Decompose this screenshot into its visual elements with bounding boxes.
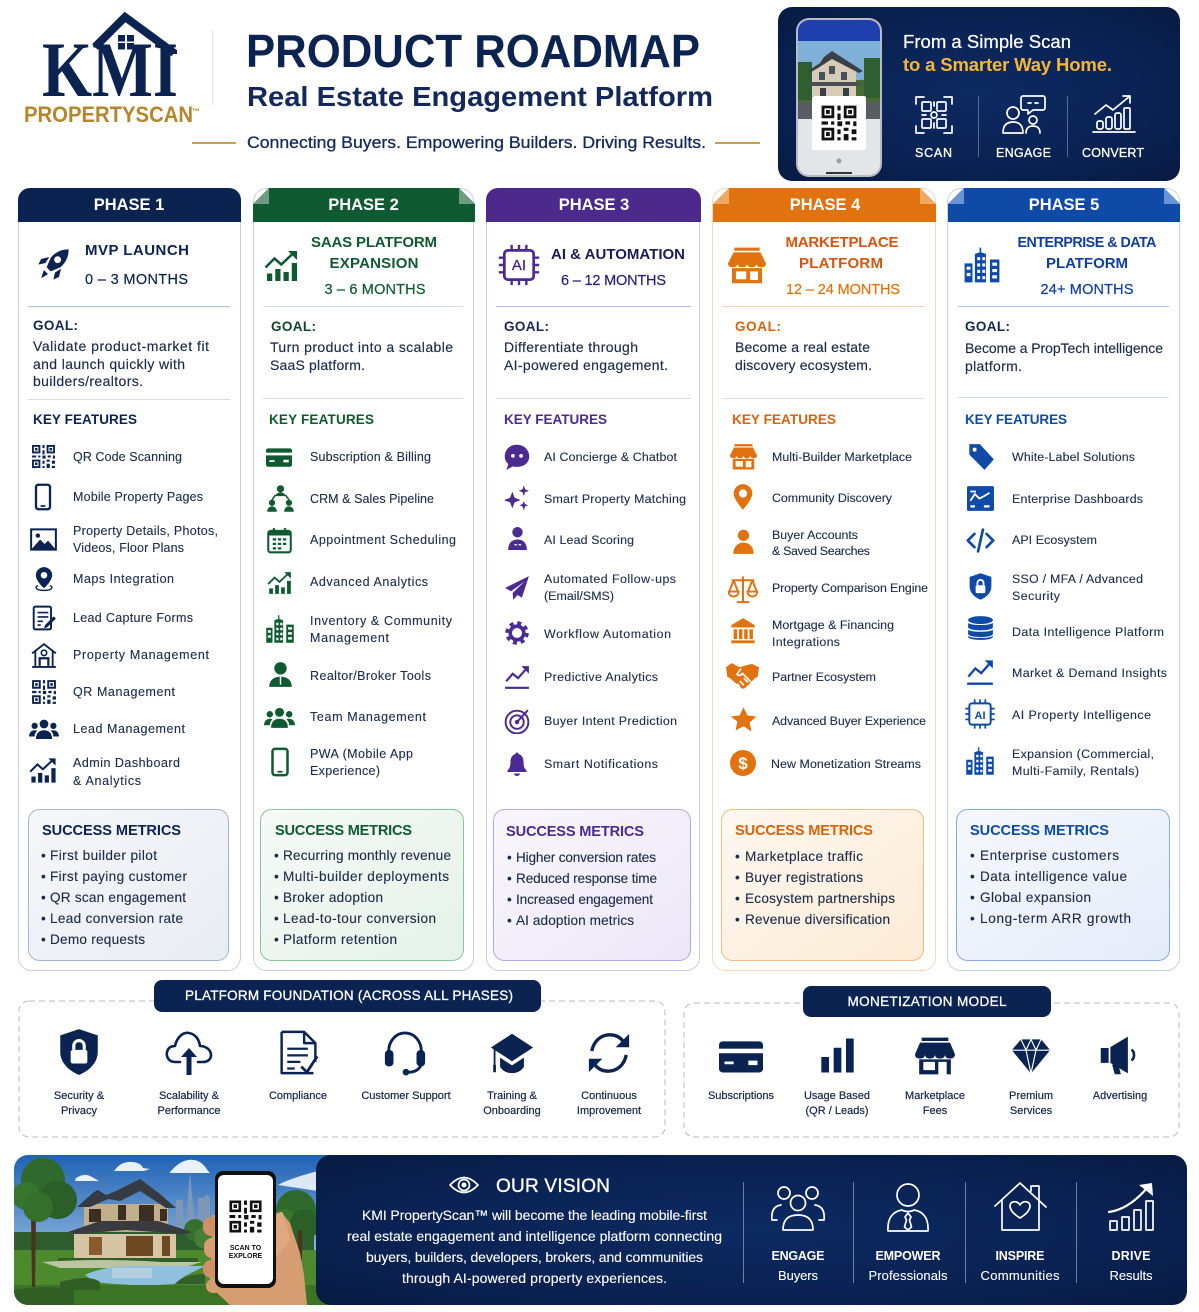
phase 2 header: PHASE 2 xyxy=(328,196,399,214)
feature: Smart Property Matching xyxy=(504,486,686,510)
vision photo: house and phone xyxy=(12,1155,334,1305)
feature: Expansion: Multi-Family, Rentals) xyxy=(1012,764,1139,778)
inspire communities: INSPIRE xyxy=(996,1249,1044,1263)
phase 3 success metrics: • xyxy=(507,913,512,928)
feature: Buyer Accounts xyxy=(733,528,870,558)
phase 5 header: PHASE 5 xyxy=(1029,196,1099,214)
feature: Multi-Builder Marketplace xyxy=(730,444,912,469)
feature: Realtor/Broker Tools: Realtor/Broker Tools xyxy=(310,669,431,683)
phase 4 success metrics: Ecosystem partnerships xyxy=(745,891,895,906)
phone in hand: SCAN TO xyxy=(230,1245,262,1252)
item: customer support: Customer Support xyxy=(361,1090,451,1102)
phone in hand: EXPLORE xyxy=(229,1253,263,1260)
phase 5 title: PLATFORM xyxy=(1046,255,1128,272)
phase 1 success metrics: SUCCESS METRICS xyxy=(42,823,181,839)
platform foundation heading xyxy=(154,980,541,1012)
phase 4 header: PHASE 4 xyxy=(790,196,861,214)
callout text: From a Simple Scan xyxy=(903,31,1071,52)
feature: Appointment Scheduling xyxy=(268,528,456,552)
drive results: DRIVE xyxy=(1112,1249,1150,1263)
feature: Mortgage & Financing xyxy=(731,618,894,649)
drive results: Results xyxy=(1110,1268,1153,1283)
phase 5 success metrics: • xyxy=(970,911,975,926)
feature: QR Code Scanning xyxy=(32,445,182,468)
inspire communities xyxy=(980,1183,1060,1283)
empower professionals: EMPOWER xyxy=(876,1249,940,1263)
logo xyxy=(24,17,200,127)
vision text: buyers, builders, developers, brokers, and communities xyxy=(366,1249,703,1265)
icon: convert: CONVERT xyxy=(1082,146,1144,160)
phase 4 success metrics: • xyxy=(735,912,740,927)
phase 4 goal: Become a real estate xyxy=(735,339,870,355)
item: premium services: Services xyxy=(1010,1105,1053,1117)
phase 4 success metrics: Buyer registrations xyxy=(745,870,863,885)
phase 5 success metrics xyxy=(956,810,1170,960)
platform foundation heading: PLATFORM FOUNDATION (ACROSS ALL PHASES) xyxy=(185,988,513,1003)
engage buyers xyxy=(772,1187,824,1283)
feature list: phase 5 xyxy=(965,444,1167,778)
feature: Community Discovery xyxy=(734,484,893,510)
icon: engage: ENGAGE xyxy=(996,146,1051,160)
feature: Lead Management xyxy=(29,720,186,739)
phase 2 title: 3 – 6 MONTHS xyxy=(324,282,426,298)
icon: convert xyxy=(1082,96,1144,160)
feature: AI Concierge & Chatbot xyxy=(505,445,678,470)
feature: Enterprise Dashboards xyxy=(967,486,1143,511)
phase 1 success metrics: • xyxy=(41,890,46,905)
phase 3 success metrics: • xyxy=(507,850,512,865)
feature: Property Details: Property Details, Photos, xyxy=(73,524,218,538)
feature: Lead Capture Forms xyxy=(34,607,193,629)
phone in hand xyxy=(203,1171,307,1305)
phase 3 success metrics xyxy=(494,810,690,960)
phase 5 goal: GOAL: xyxy=(965,319,1010,334)
phase 2 success metrics: Multi-builder deployments xyxy=(283,869,449,884)
item: premium services: Premium xyxy=(1009,1090,1053,1102)
phase 1 success metrics: • xyxy=(41,869,46,884)
feature: QR Management xyxy=(32,680,176,704)
phase 2 success metrics: • xyxy=(274,911,279,926)
feature: Expansion xyxy=(966,747,1154,778)
empower professionals: Professionals xyxy=(868,1268,948,1283)
feature: Maps Integration xyxy=(36,567,174,590)
item: security: Privacy xyxy=(61,1105,98,1117)
phase 2 title: EXPANSION xyxy=(330,255,418,272)
feature: Predictive Analytics xyxy=(505,666,658,688)
item: advertising: Advertising xyxy=(1093,1090,1147,1102)
feature: Market & Demand Insights: Market & Demand Insights xyxy=(1012,666,1167,680)
phase 4 success metrics: Marketplace traffic xyxy=(745,849,863,864)
feature list: phase 2 xyxy=(264,448,456,778)
item: marketplace fees: Marketplace xyxy=(905,1090,965,1102)
icon: scan xyxy=(915,97,952,160)
phase 5 goal: Become a PropTech intelligence xyxy=(965,340,1163,356)
logo wordmark KMI: KMI xyxy=(42,26,178,113)
phase 3 goal: GOAL: xyxy=(504,319,549,334)
feature: Buyer Intent Prediction: Buyer Intent Prediction xyxy=(544,714,677,728)
feature: Admin Dashboard: & Analytics xyxy=(73,774,141,788)
item: scalability: Performance xyxy=(158,1105,220,1117)
phase 2 success metrics xyxy=(260,810,464,960)
phase 2 success metrics: SUCCESS METRICS xyxy=(275,823,412,839)
drive results xyxy=(1109,1183,1153,1283)
phase 3 success metrics: SUCCESS METRICS xyxy=(506,824,644,840)
feature: Smart Property Matching: Smart Property Matching xyxy=(544,492,686,506)
feature: Advanced Buyer Experience xyxy=(731,707,926,732)
feature: Mobile Property Pages: Mobile Property Pages xyxy=(73,490,203,504)
feature: Data Intelligence Platform: Data Intelligence Platform xyxy=(1012,625,1164,639)
feature: Inventory & Community Management: Inventory & Community xyxy=(310,614,453,628)
phase 3 success metrics: AI adoption metrics xyxy=(516,913,634,928)
item: marketplace fees xyxy=(905,1038,965,1117)
vision text: KMI PropertyScan™ will become the leading mobile-first xyxy=(362,1207,707,1223)
item: continuous improvement xyxy=(577,1034,641,1117)
feature: Realtor/Broker Tools xyxy=(269,662,431,687)
item: continuous improvement: Continuous xyxy=(581,1090,637,1102)
feature: Expansion: Expansion (Commercial, xyxy=(1012,747,1154,761)
feature: AI Property Intelligence: AI Property Intelligence xyxy=(1012,708,1151,722)
phase 1 success metrics: • xyxy=(41,848,46,863)
phase 4 success metrics: • xyxy=(735,870,740,885)
phase 1 goal: builders/realtors. xyxy=(33,373,143,389)
phase 1 goal: Validate product-market fit xyxy=(33,338,209,354)
panel: platform foundation xyxy=(19,980,665,1137)
phase 3 goal xyxy=(504,319,668,373)
feature: SSO / MFA / Advanced Security: SSO / MFA / Advanced xyxy=(1012,572,1143,586)
item: customer support xyxy=(361,1033,451,1102)
item: marketplace fees: Fees xyxy=(923,1105,948,1117)
feature: Smart Notifications: Smart Notifications xyxy=(544,757,658,771)
phase 4 success metrics: • xyxy=(735,849,740,864)
panel: phase 2 xyxy=(253,188,475,970)
phase 4 success metrics: • xyxy=(735,891,740,906)
phase 5 success metrics: SUCCESS METRICS xyxy=(970,823,1109,839)
phase 4 title xyxy=(728,234,900,298)
phase 4 title: 12 – 24 MONTHS xyxy=(786,282,900,298)
vision text xyxy=(347,1207,722,1286)
phase 2 success metrics: Recurring monthly revenue xyxy=(283,848,451,863)
item: security xyxy=(54,1029,105,1117)
phase 1 success metrics: First builder pilot xyxy=(50,848,157,863)
phase 4 title: MARKETPLACE xyxy=(786,234,898,251)
panel: monetization model xyxy=(684,986,1179,1137)
phase 4 goal: discovery ecosystem. xyxy=(735,357,872,373)
phase 4 goal: GOAL: xyxy=(735,319,781,334)
feature: Appointment Scheduling: Appointment Scheduling xyxy=(310,533,456,547)
feature: API Ecosystem xyxy=(968,530,1097,551)
phase 3 goal: Differentiate through xyxy=(504,339,638,355)
phase 3 header xyxy=(486,188,701,222)
panel: phase 1 xyxy=(18,188,241,970)
phase 2 success metrics: • xyxy=(274,890,279,905)
item: training: Onboarding xyxy=(483,1105,541,1117)
item: usage based: (QR / Leads) xyxy=(806,1105,868,1117)
feature: Advanced Analytics xyxy=(268,572,428,594)
feature: Inventory & Community Management xyxy=(266,614,453,645)
feature: AI Property Intelligence: AI xyxy=(974,710,986,722)
logo: ™ xyxy=(192,107,200,116)
item: security: Security & xyxy=(54,1090,105,1102)
feature: Automated Follow-ups: Automated Follow-ups xyxy=(544,572,676,586)
panel: our vision xyxy=(12,1155,1187,1305)
item: usage based xyxy=(804,1039,870,1117)
phase 1 success metrics: Demo requests xyxy=(50,932,145,947)
phase 3 key features heading: KEY FEATURES xyxy=(504,412,607,427)
feature: Property Details xyxy=(31,524,218,555)
phase 2 title xyxy=(266,234,437,298)
feature: Admin Dashboard: Admin Dashboard xyxy=(73,756,180,770)
phase 3 success metrics: Higher conversion rates xyxy=(516,850,656,865)
feature: Advanced Analytics: Advanced Analytics xyxy=(310,575,428,589)
phase 2 header xyxy=(253,188,475,222)
phase 5 success metrics: Enterprise customers xyxy=(980,848,1119,863)
phase 2 goal xyxy=(270,319,453,373)
phase 3 goal: AI-powered engagement. xyxy=(504,357,668,373)
phase 5 key features heading: KEY FEATURES xyxy=(965,412,1067,427)
item: advertising xyxy=(1093,1037,1147,1102)
feature: Predictive Analytics: Predictive Analytics xyxy=(544,670,658,684)
feature: Property Details: Videos, Floor Plans xyxy=(73,541,184,555)
phase 4 goal xyxy=(735,319,872,373)
phase 2 success metrics: • xyxy=(274,932,279,947)
feature: Data Intelligence Platform xyxy=(968,616,1164,640)
phase 3 success metrics: • xyxy=(507,892,512,907)
phase 4 header xyxy=(713,188,936,222)
feature list: phase 4 xyxy=(726,444,928,776)
phase 1 header: PHASE 1 xyxy=(94,196,164,214)
phase 5 goal: platform. xyxy=(965,358,1022,374)
phase 3 title: AI xyxy=(512,257,526,274)
panel: phase 3 xyxy=(486,188,701,970)
phase 2 goal: GOAL: xyxy=(271,319,316,334)
phase 4 key features heading: KEY FEATURES xyxy=(732,412,836,427)
feature: API Ecosystem: API Ecosystem xyxy=(1012,533,1097,547)
phase 1 goal xyxy=(33,318,209,389)
feature: AI Lead Scoring: AI Lead Scoring xyxy=(544,533,634,547)
phase 1 title: 0 – 3 MONTHS xyxy=(85,272,188,288)
engage buyers: Buyers xyxy=(778,1268,818,1283)
icon: house roof xyxy=(95,17,177,54)
phase 4 title: PLATFORM xyxy=(799,255,883,272)
feature: AI Concierge & Chatbot: AI Concierge & Chatbot xyxy=(544,450,678,464)
panel: phase 5 xyxy=(948,188,1180,970)
feature: Enterprise Dashboards: Enterprise Dashboards xyxy=(1012,492,1143,506)
feature: Community Discovery: Community Discovery xyxy=(772,491,893,505)
feature: Workflow Automation: Workflow Automation xyxy=(544,627,671,641)
phase 2 title: SAAS PLATFORM xyxy=(311,234,437,251)
phase 1 success metrics: • xyxy=(41,911,46,926)
vision text: through AI-powered property experiences. xyxy=(402,1270,667,1286)
feature: Property Management xyxy=(32,644,210,667)
phase 5 goal xyxy=(965,319,1163,374)
vision panel background xyxy=(316,1155,1187,1305)
feature: Team Management xyxy=(264,708,427,728)
feature: New Monetization Streams: New Monetization Streams xyxy=(771,757,921,771)
phase 1 goal: GOAL: xyxy=(33,318,78,333)
phase 5 success metrics: • xyxy=(970,848,975,863)
phase 2 success metrics: • xyxy=(274,869,279,884)
engage buyers: ENGAGE xyxy=(772,1249,824,1263)
feature: Automated Follow-ups xyxy=(505,572,676,603)
phase 2 success metrics: Broker adoption xyxy=(283,890,383,905)
feature: Buyer Intent Prediction xyxy=(506,710,677,733)
phase 5 success metrics: • xyxy=(970,890,975,905)
item: scalability: Scalability & xyxy=(159,1090,220,1102)
feature list: phase 3 xyxy=(504,445,686,776)
vision text: real estate engagement and intelligence platform connecting xyxy=(347,1228,722,1244)
feature: New Monetization Streams xyxy=(730,750,921,776)
phase 1 header xyxy=(18,188,241,222)
phase 5 success metrics: Long-term ARR growth xyxy=(980,911,1131,926)
feature: Partner Ecosystem: Partner Ecosystem xyxy=(772,670,876,684)
feature list: phase 1 xyxy=(29,445,218,788)
feature: Partner Ecosystem xyxy=(726,663,876,689)
item: subscriptions xyxy=(708,1041,775,1102)
title: PRODUCT ROADMAP xyxy=(246,25,700,77)
vision heading: OUR VISION xyxy=(496,1176,610,1197)
feature: Market & Demand Insights xyxy=(967,660,1167,684)
logo wordmark PropertyScan: PROPERTYSCAN xyxy=(24,102,193,127)
phase 5 title xyxy=(965,235,1156,298)
phase 5 title: ENTERPRISE & DATA xyxy=(1018,235,1156,251)
feature: SSO / MFA / Advanced Security xyxy=(970,572,1143,603)
phase 1 success metrics: QR scan engagement xyxy=(50,890,186,905)
phase 3 title: 6 – 12 MONTHS xyxy=(561,273,666,289)
feature: Admin Dashboard xyxy=(30,756,180,788)
phase 5 header xyxy=(948,188,1180,222)
phase 2 goal: SaaS platform. xyxy=(270,357,365,373)
feature: Buyer Accounts: Buyer Accounts xyxy=(772,528,858,542)
feature: Property Comparison Engine xyxy=(729,576,928,602)
item: training: Training & xyxy=(487,1090,538,1102)
feature: Team Management: Team Management xyxy=(310,710,427,724)
phone mockup xyxy=(796,18,882,177)
panel: phase 4 xyxy=(712,188,936,970)
feature: White-Label Solutions: White-Label Solutions xyxy=(1012,450,1135,464)
phase 3 title xyxy=(499,245,685,289)
phase 2 goal: Turn product into a scalable xyxy=(270,339,453,355)
feature: Subscription & Billing: Subscription & Billing xyxy=(310,450,431,464)
item: premium services xyxy=(1009,1039,1053,1117)
item: subscriptions: Subscriptions xyxy=(708,1090,775,1102)
feature: Property Management: Property Management xyxy=(73,648,210,662)
feature: SSO / MFA / Advanced Security: Security xyxy=(1012,589,1061,603)
feature: Mortgage & Financing: Mortgage & Financing xyxy=(772,618,894,632)
feature: White-Label Solutions xyxy=(969,444,1135,470)
phase 3 success metrics: Reduced response time xyxy=(516,871,657,886)
monetization heading xyxy=(803,986,1051,1017)
phase 3 success metrics: • xyxy=(507,871,512,886)
feature: Subscription & Billing xyxy=(266,448,431,467)
feature: Multi-Builder Marketplace: Multi-Builder Marketplace xyxy=(772,450,912,464)
feature: New Monetization Streams: $ xyxy=(738,754,748,773)
phase 2 success metrics: Lead-to-tour conversion xyxy=(283,911,436,926)
monetization heading: MONETIZATION MODEL xyxy=(848,994,1007,1009)
inspire communities: Communities xyxy=(980,1268,1060,1283)
tagline: Connecting Buyers. Empowering Builders. Driving Results. xyxy=(247,133,706,152)
subtitle: Real Estate Engagement Platform xyxy=(247,81,713,112)
phase 2 success metrics: • xyxy=(274,848,279,863)
phase 1 goal: and launch quickly with xyxy=(33,356,185,372)
phase 3 success metrics: Increased engagement xyxy=(516,892,653,907)
item: compliance xyxy=(269,1032,327,1102)
item: continuous improvement: Improvement xyxy=(577,1105,641,1117)
feature: PWA xyxy=(272,747,413,778)
phase 5 success metrics: • xyxy=(970,869,975,884)
feature: QR Code Scanning: QR Code Scanning xyxy=(73,450,182,464)
phase 1 success metrics: • xyxy=(41,932,46,947)
feature: PWA: PWA (Mobile App xyxy=(310,747,413,761)
phase 1 success metrics: Lead conversion rate xyxy=(50,911,183,926)
phase 3 title: AI & AUTOMATION xyxy=(551,246,685,263)
feature: Lead Capture Forms: Lead Capture Forms xyxy=(73,611,193,625)
feature: Mortgage & Financing: Integrations xyxy=(772,635,840,649)
phase 4 success metrics: SUCCESS METRICS xyxy=(735,823,873,839)
feature: PWA: Experience) xyxy=(310,764,380,778)
phase 1 title xyxy=(38,242,189,288)
feature: Lead Management: Lead Management xyxy=(73,722,186,736)
phase 4 success metrics: Revenue diversification xyxy=(745,912,890,927)
item: scalability xyxy=(158,1033,220,1117)
phase 1 title: MVP LAUNCH xyxy=(85,242,189,259)
feature: Smart Notifications xyxy=(508,752,658,776)
vision heading xyxy=(449,1176,609,1194)
feature: CRM & Sales Pipeline xyxy=(267,485,434,512)
feature: AI Lead Scoring xyxy=(508,527,634,550)
phase 5 title: 24+ MONTHS xyxy=(1040,282,1134,298)
item: compliance: Compliance xyxy=(269,1090,327,1102)
phase 1 key features heading: KEY FEATURES xyxy=(33,412,137,427)
feature: AI Property Intelligence xyxy=(965,699,1151,729)
callout text xyxy=(903,31,1112,75)
callout text: to a Smarter Way Home. xyxy=(903,54,1112,75)
feature: Maps Integration: Maps Integration xyxy=(73,572,174,586)
feature: Buyer Accounts: & Saved Searches xyxy=(772,544,870,558)
feature: Automated Follow-ups: (Email/SMS) xyxy=(544,589,614,603)
phase 1 success metrics xyxy=(28,810,228,960)
feature: Workflow Automation xyxy=(507,623,671,643)
feature: Inventory & Community Management: Management xyxy=(310,631,390,645)
phase 1 success metrics: First paying customer xyxy=(50,869,187,884)
feature: Mobile Property Pages xyxy=(36,485,203,509)
item: usage based: Usage Based xyxy=(804,1090,870,1102)
phase 2 key features heading: KEY FEATURES xyxy=(269,412,374,427)
feature: Advanced Buyer Experience: Advanced Buyer Experience xyxy=(772,714,926,728)
icon: engage xyxy=(996,96,1051,160)
feature: CRM & Sales Pipeline: CRM & Sales Pipeline xyxy=(310,492,434,506)
empower professionals xyxy=(868,1184,948,1283)
phase 4 success metrics xyxy=(722,810,924,960)
feature: QR Management: QR Management xyxy=(73,685,176,699)
phase 5 success metrics: Data intelligence value xyxy=(980,869,1127,884)
feature: Property Comparison Engine: Property Comparison Engine xyxy=(772,581,928,595)
phase 5 success metrics: Global expansion xyxy=(980,890,1091,905)
phase 2 success metrics: Platform retention xyxy=(283,932,397,947)
phase 3 header: PHASE 3 xyxy=(559,196,629,214)
panel: scan to home xyxy=(778,7,1180,181)
item: training xyxy=(483,1034,541,1117)
icon: scan: SCAN xyxy=(915,146,952,160)
